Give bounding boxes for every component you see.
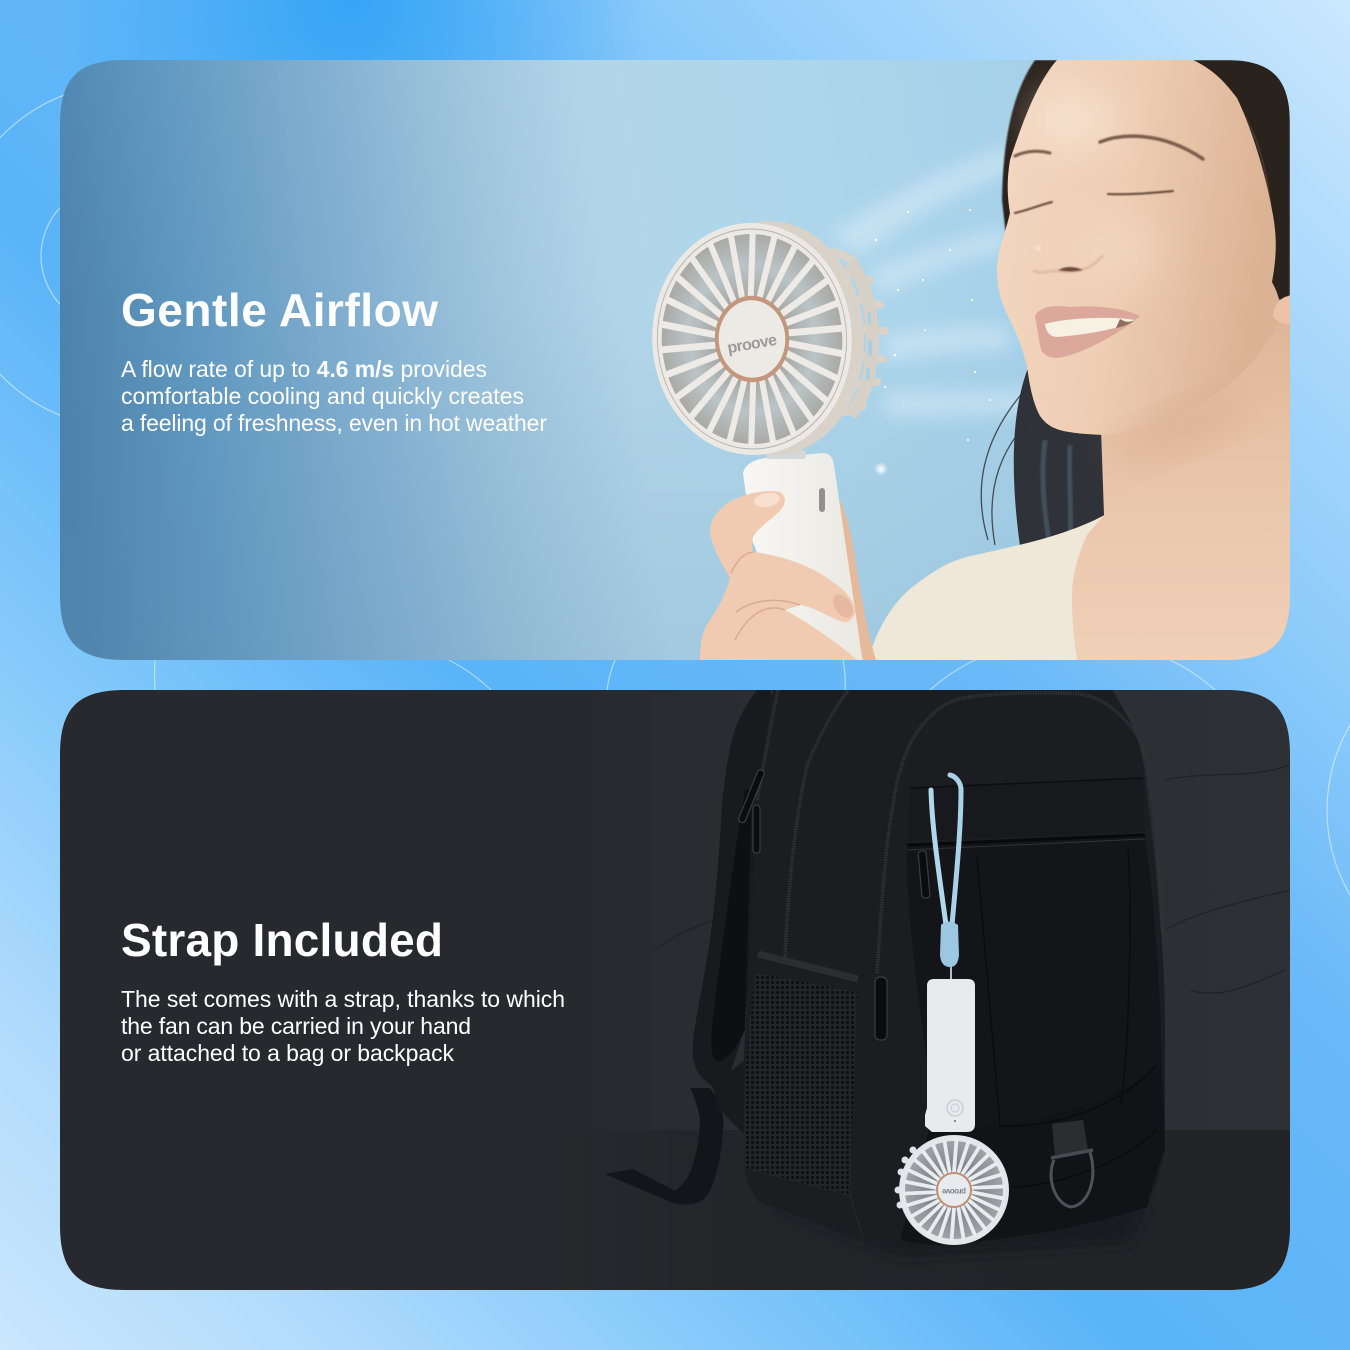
text block: airflow description: A flow rate of up to 4.6 m/s provides [121,356,487,382]
panel: strap included [60,690,1290,1290]
zippers and seams [745,690,1163,1237]
pocket flap band [907,778,1145,841]
lower front pocket [907,838,1162,1065]
small fan logo: proove [941,1187,966,1196]
small fan head [894,1135,1009,1245]
zipper pulls [738,769,930,1040]
text block: strap description: The set comes with a strap, thanks to which [121,986,565,1012]
heading: strap included: Strap Included [121,914,443,966]
text block: airflow description: comfortable cooling and quickly creates [121,383,524,409]
icon: hanging fan with strap [894,775,1009,1245]
text block: strap description: the fan can be carried in your hand [121,1013,471,1039]
photo: black backpack [605,690,1165,1258]
shoulder strap [693,690,780,1087]
text block: airflow description [121,356,547,436]
text block: strap description [121,986,565,1066]
silicone strap [931,775,961,979]
hair [981,60,1290,560]
fan handle [743,450,863,660]
text block: airflow description: a feeling of freshness, even in hot weather [121,410,547,436]
backpack body [743,690,1165,1245]
webbing strap [605,1088,724,1204]
strap bracket [712,1060,745,1135]
icon: handheld fan [648,216,885,660]
mesh side pocket [744,954,858,1195]
panel background: blue gradient [60,60,1290,660]
text block: strap description: or attached to a bag or backpack [121,1040,454,1066]
hand [700,491,857,660]
airflow streams and sparkles [830,145,1030,476]
fan back cage [754,221,889,455]
smile [1035,306,1140,358]
finger behind handle [840,500,876,660]
bottom trim [900,1065,1165,1245]
panel: gentle airflow [60,60,1290,660]
closed eyes [1015,191,1173,213]
panel background: dark wall and floor [60,690,1290,1290]
neck [1072,295,1290,660]
fan front grille [648,220,856,458]
fan logo: proove [726,332,778,357]
heading: gentle airflow: Gentle Airflow [121,284,438,336]
shirt [872,515,1104,660]
fan body [925,979,975,1132]
ear [1273,296,1290,324]
photo: woman with closed eyes [868,60,1290,660]
d-ring buckle [1051,1120,1093,1207]
nose [1033,245,1103,273]
face [997,60,1280,435]
eyebrows [1015,136,1203,159]
